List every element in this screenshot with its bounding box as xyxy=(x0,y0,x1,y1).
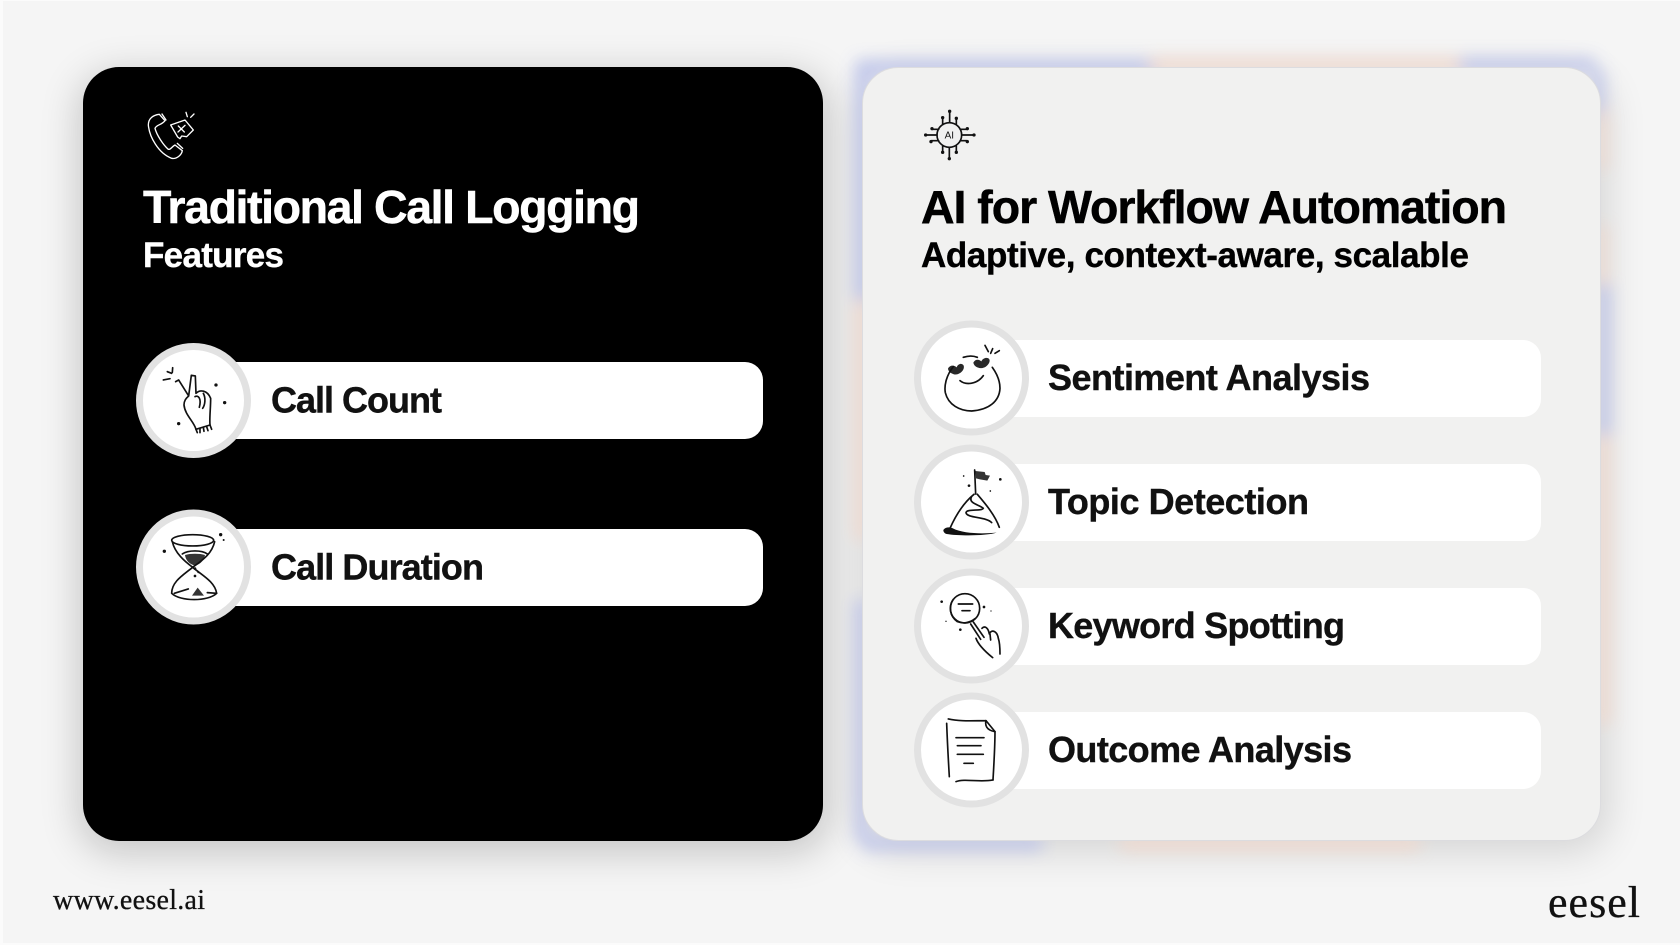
item: sentiment analysis xyxy=(918,324,1541,432)
icon: phone with message bubble xyxy=(148,112,194,158)
label: Call Duration xyxy=(271,546,484,588)
icon: document xyxy=(947,719,995,782)
label: Sentiment Analysis xyxy=(1048,357,1370,398)
label: Call Count xyxy=(271,380,442,420)
icon: hourglass xyxy=(163,533,225,600)
panel glow xyxy=(855,58,1610,850)
icon: AI chip: AI xyxy=(945,131,954,142)
icon: hand peace sign xyxy=(163,368,226,433)
panel: ai for workflow automation xyxy=(855,58,1610,852)
icon: magnifier and hand xyxy=(940,594,1000,658)
label: Outcome Analysis xyxy=(1048,729,1352,770)
item: keyword spotting xyxy=(918,572,1541,680)
label: Keyword Spotting xyxy=(1048,605,1345,646)
item: topic detection xyxy=(918,448,1541,556)
subheading: features: Features xyxy=(143,236,284,275)
heading: traditional call logging: Traditional Call Logging xyxy=(143,181,640,233)
footer: website: www.eesel.ai xyxy=(53,885,205,916)
label: Topic Detection xyxy=(1048,481,1309,522)
icon: smiley with heart eyes xyxy=(945,345,1000,411)
item: call duration xyxy=(140,513,763,621)
panel: traditional call logging xyxy=(80,67,828,852)
item: outcome analysis xyxy=(918,696,1541,804)
subheading: adaptive, context-aware, scalable: Adaptive, context-aware, scalable xyxy=(921,236,1469,275)
icon: mountain with flag xyxy=(943,470,1002,535)
heading: ai for workflow automation: AI for Workflow Automation xyxy=(921,181,1507,233)
footer: eesel logo: eesel xyxy=(1548,878,1640,927)
item: call count xyxy=(140,346,763,454)
icon: AI chip xyxy=(924,110,976,160)
